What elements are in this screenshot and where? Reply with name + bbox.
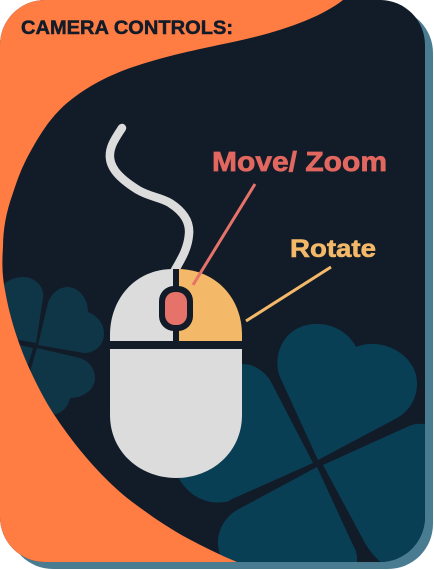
scroll ring: [159, 286, 193, 331]
clover: small faded: [0, 277, 104, 415]
pointer line: move and zoom: [193, 184, 255, 285]
pointer line: rotate: [246, 267, 331, 321]
title: CAMERA CONTROLS:: [21, 17, 233, 39]
label: rotate: Rotate: [290, 235, 376, 263]
clover: large: [178, 324, 430, 570]
right button: [179, 269, 242, 341]
mouse icon: [110, 128, 242, 478]
scroll slot: [173, 269, 179, 341]
mouse body: [110, 349, 242, 478]
mouse cord: [110, 128, 189, 270]
left button: [110, 269, 173, 341]
scroll wheel: [165, 292, 187, 325]
label: move and zoom: Move/ Zoom: [212, 146, 387, 177]
